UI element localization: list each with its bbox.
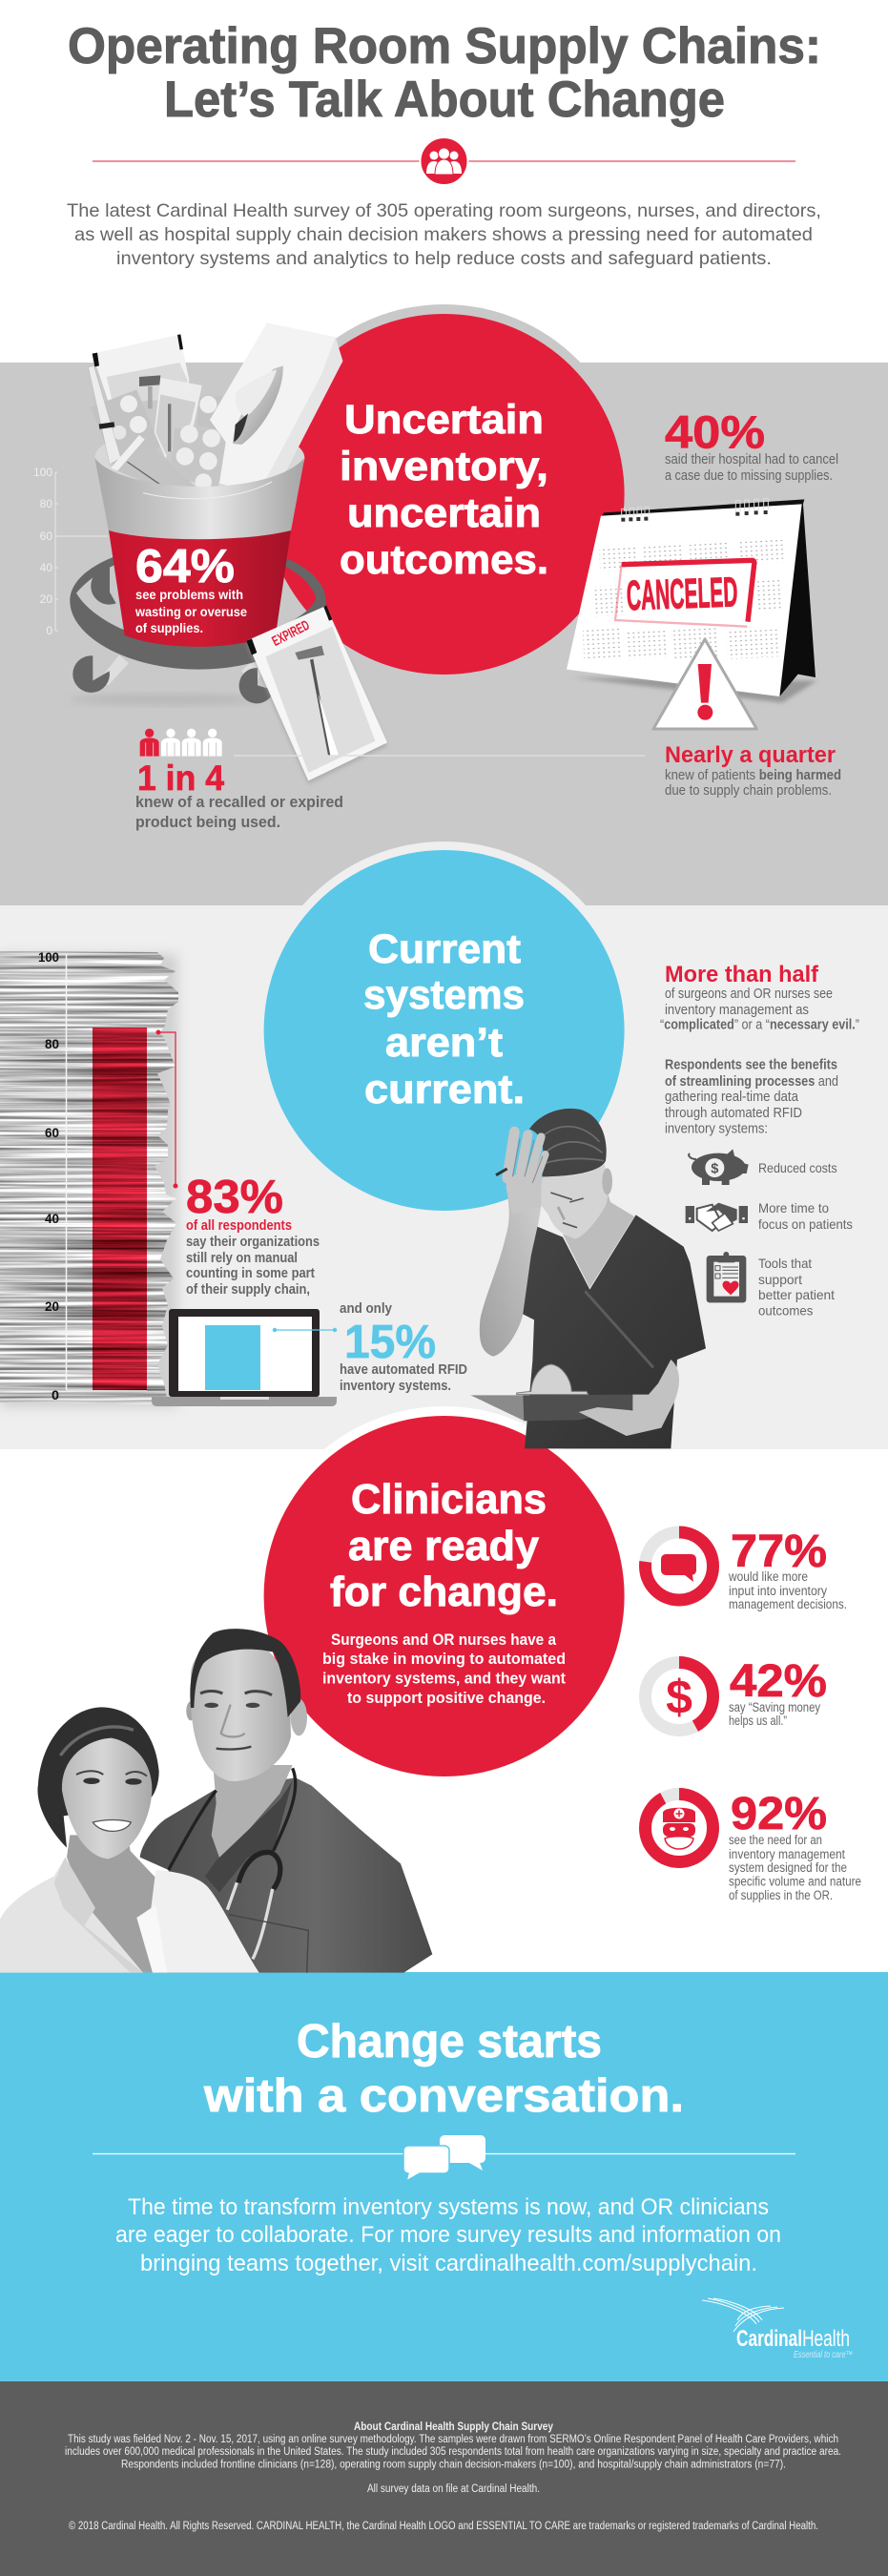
stat: 1 in 4 xyxy=(135,758,343,831)
stat: 42%: say “Saving money xyxy=(729,1700,820,1714)
axis labels: 60 xyxy=(45,1125,59,1140)
axis: 20 xyxy=(40,592,52,606)
heading: systems xyxy=(363,972,525,1018)
clipboard xyxy=(470,1395,525,1421)
label: tools: support xyxy=(758,1272,802,1287)
stat: 15%: inventory systems. xyxy=(340,1378,451,1394)
label: tools: better patient xyxy=(758,1287,835,1302)
heading: with a conversation. xyxy=(203,2070,684,2122)
heading: inventory, xyxy=(340,444,548,489)
stat: 77%: would like more xyxy=(728,1569,808,1584)
diagonal seam xyxy=(585,1291,653,1367)
stat: 77% xyxy=(728,1527,847,1611)
axis labels: 80 xyxy=(45,1036,59,1051)
stat: 77%: input into inventory xyxy=(729,1584,827,1598)
label: more time: focus on patients xyxy=(758,1216,853,1232)
methodology text xyxy=(65,2434,841,2495)
icon: piggy bank xyxy=(689,1149,749,1185)
stat: 1 in 4: product being used. xyxy=(135,814,280,831)
male clinician xyxy=(140,1629,432,1973)
heading: Clinicians xyxy=(351,1476,547,1523)
logo: Cardinal Health: CardinalHealth xyxy=(736,2326,850,2352)
lower arm and hand xyxy=(579,1360,679,1436)
stat: 83%: say their organizations xyxy=(186,1234,320,1250)
text: respondents benefits: of streamlining processes and xyxy=(665,1073,838,1090)
people icons: 1 in 4 xyxy=(140,729,222,757)
bucket interior xyxy=(94,425,304,491)
stat: nearly a quarter: knew of patients being harmed xyxy=(665,767,841,783)
stat: 15%: and only xyxy=(340,1300,393,1317)
methodology text: Respondents included frontline clinicians (n=128), operating room supply chain decision-makers (n=100), and hospital/supply chain administrators (n=77). xyxy=(121,2460,786,2471)
label: tools xyxy=(758,1256,835,1319)
body text: The time to transform inventory systems is now, and OR clinicians xyxy=(128,2194,769,2220)
chart: paper stack with 83% bar xyxy=(0,945,181,1412)
text: more than half: of surgeons and OR nurses see xyxy=(665,986,833,1002)
text: respondents benefits: through automated RFID xyxy=(665,1105,802,1121)
icon: dollar: $ xyxy=(666,1671,692,1724)
axis labels: 0 xyxy=(52,1387,59,1402)
stat: 64%: wasting or overuse xyxy=(134,604,247,619)
text: respondents benefits: gathering real-time data xyxy=(665,1089,799,1105)
photo: two clinicians xyxy=(0,1629,432,1973)
heading: aren’t xyxy=(385,1020,503,1066)
text: more than half: inventory management as xyxy=(665,1002,809,1018)
panel: uncertain inventory xyxy=(33,322,841,831)
stat: 77%: management decisions. xyxy=(729,1597,847,1611)
divider with people icon xyxy=(93,137,795,185)
circle body text: big stake in moving to automated xyxy=(322,1650,566,1668)
stat: 15%: have automated RFID xyxy=(340,1361,467,1378)
methodology text: All survey data on file at Cardinal Health. xyxy=(367,2483,540,2495)
circle: current systems xyxy=(264,850,625,1211)
donut: 77% xyxy=(645,1532,713,1600)
stat: 92%: specific volume and nature xyxy=(729,1874,861,1889)
circle body text: to support positive change. xyxy=(347,1689,546,1707)
icon: speech bubble xyxy=(661,1554,696,1582)
heading: Change starts xyxy=(297,2016,602,2067)
stat: 64% xyxy=(134,541,247,635)
axis labels xyxy=(38,949,59,1402)
text: respondents benefits xyxy=(665,1057,838,1137)
panel: current systems xyxy=(0,926,859,1448)
circle: uncertain inventory xyxy=(264,314,625,675)
heading: for change. xyxy=(330,1568,558,1615)
female clinician xyxy=(0,1707,259,1973)
expired pouch xyxy=(246,606,387,784)
stat: 40%: a case due to missing supplies. xyxy=(665,467,833,484)
text: respondents benefits: inventory systems: xyxy=(665,1120,768,1137)
stat: 83%: still rely on manual xyxy=(186,1250,298,1266)
circle body text xyxy=(322,1631,566,1707)
title: Operating Room Supply Chains: xyxy=(68,18,821,74)
callout line xyxy=(156,1030,177,1189)
stat: 40%: said their hospital had to cancel xyxy=(665,451,838,467)
panel: footer xyxy=(65,2421,841,2532)
tissue box xyxy=(210,322,342,489)
stat: 64%: 64% xyxy=(135,541,235,592)
stat: 42%: helps us all.” xyxy=(729,1714,787,1728)
label: more time xyxy=(758,1200,853,1232)
heading: Current xyxy=(368,926,521,972)
text: more than half: “complicated” or a “necessary evil.” xyxy=(660,1017,859,1032)
axis xyxy=(33,466,108,637)
intro text: as well as hospital supply chain decision makers shows a pressing need for automated xyxy=(74,224,813,245)
bucket red band xyxy=(109,530,291,647)
stat: 92%: inventory management xyxy=(729,1847,845,1861)
stat: 15%: 15% xyxy=(344,1317,436,1368)
red bar xyxy=(93,1028,147,1390)
stat: 83% xyxy=(186,1172,320,1298)
stat: 92%: of supplies in the OR. xyxy=(729,1888,833,1902)
intro text: The latest Cardinal Health survey of 305 operating room surgeons, nurses, and directors, xyxy=(67,200,821,221)
about heading: About Cardinal Health Supply Chain Survey xyxy=(354,2421,554,2433)
stat: 15% xyxy=(340,1300,467,1394)
heading: Uncertain xyxy=(344,397,544,443)
scrubs xyxy=(522,1215,706,1448)
canceled stamp xyxy=(615,560,754,627)
heading xyxy=(363,926,525,1112)
stat: 1 in 4: 1 in 4 xyxy=(137,758,224,798)
stat: 1 in 4: knew of a recalled or expired xyxy=(135,794,343,811)
hair xyxy=(529,1109,607,1176)
laptop chart xyxy=(152,1309,337,1406)
stat: 64%: of supplies. xyxy=(135,620,203,635)
circle: clinicians ready xyxy=(264,1416,625,1776)
text: respondents benefits: Respondents see the benefits xyxy=(665,1057,837,1073)
nurse photo and benefit icons xyxy=(470,1109,853,1448)
heading: are ready xyxy=(348,1523,540,1569)
panel: change starts with a conversation xyxy=(93,2016,853,2360)
donut: 92% xyxy=(645,1794,713,1862)
stat: 83%: 83% xyxy=(186,1172,283,1223)
axis: 80 xyxy=(40,497,52,510)
stat: nearly a quarter: due to supply chain problems. xyxy=(665,782,832,799)
stat: nearly a quarter xyxy=(665,742,841,799)
axis labels: 100 xyxy=(38,949,59,965)
supplies in bucket xyxy=(89,322,342,490)
stat: 77%: 77% xyxy=(731,1527,827,1577)
title xyxy=(68,18,821,128)
label: tools: Tools that xyxy=(758,1256,812,1271)
stand and wheels xyxy=(70,542,326,705)
stat: nearly a quarter: Nearly a quarter xyxy=(665,742,836,768)
axis: 60 xyxy=(40,530,52,543)
label: more time: More time to xyxy=(758,1200,829,1215)
stat: 92%: system designed for the xyxy=(729,1860,847,1875)
title: Let’s Talk About Change xyxy=(164,72,725,128)
stat: 92%: 92% xyxy=(731,1789,827,1839)
circle body text: inventory systems, and they want xyxy=(322,1670,566,1687)
axis labels: 20 xyxy=(45,1298,59,1314)
icon: piggy bank: $ xyxy=(711,1161,718,1176)
canceled stamp: CANCELED xyxy=(626,569,738,619)
logo: Cardinal Health: Essential to care™ xyxy=(794,2350,853,2360)
label: reduced costs: Reduced costs xyxy=(758,1160,837,1175)
stat: 83%: of all respondents xyxy=(186,1217,292,1234)
axis: 100 xyxy=(33,466,52,479)
axis: 40 xyxy=(40,561,52,574)
nurse xyxy=(470,1109,706,1448)
heading: uncertain xyxy=(347,490,541,536)
icon: surgical cap and mask xyxy=(663,1808,695,1849)
bucket front silver xyxy=(94,458,304,541)
stat: 40%: 40% xyxy=(665,408,765,458)
icon: clipboard heart xyxy=(707,1252,746,1302)
stat: 42%: 42% xyxy=(730,1656,827,1707)
donut: 42% xyxy=(645,1662,713,1731)
label: tools: outcomes xyxy=(758,1303,813,1319)
text: more than half xyxy=(660,962,859,1032)
intro text xyxy=(67,200,821,269)
stat: 92% xyxy=(729,1789,861,1902)
raised arm and hand xyxy=(480,1186,541,1357)
stat: 83%: of their supply chain, xyxy=(186,1281,310,1298)
stat: 42% xyxy=(729,1656,827,1728)
calendar illustration xyxy=(567,499,817,729)
heading xyxy=(203,2016,684,2122)
expired pouch: EXPIRED xyxy=(270,618,312,650)
heading: outcomes. xyxy=(340,537,548,583)
axis: 0 xyxy=(46,624,52,637)
face xyxy=(541,1164,609,1238)
stat: 64%: see problems with xyxy=(135,587,243,602)
intro text: inventory systems and analytics to help reduce costs and safeguard patients. xyxy=(116,248,772,269)
heading xyxy=(340,397,548,583)
stat: 83%: counting in some part xyxy=(186,1265,315,1281)
body text: are eager to collaborate. For more survey results and information on xyxy=(115,2222,781,2248)
axis labels: 40 xyxy=(45,1211,59,1226)
connector line xyxy=(234,755,645,757)
warning triangle xyxy=(653,639,756,729)
body text: bringing teams together, visit cardinalhealth.com/supplychain. xyxy=(140,2251,757,2276)
text: more than half: More than half xyxy=(665,962,819,987)
divider with speech bubbles xyxy=(93,2135,795,2181)
body text xyxy=(115,2194,781,2276)
logo: Cardinal Health xyxy=(702,2298,853,2360)
stat: 92%: see the need for an xyxy=(729,1833,822,1847)
bucket on stand with supplies xyxy=(70,322,387,784)
heading: current. xyxy=(364,1067,525,1112)
stat: 40% xyxy=(665,408,838,484)
neck and chest xyxy=(563,1180,634,1288)
panel: clinicians ready xyxy=(0,1476,861,1973)
circle body text: Surgeons and OR nurses have a xyxy=(331,1631,556,1649)
header xyxy=(67,18,821,269)
heading xyxy=(330,1476,558,1615)
icon: handshake xyxy=(686,1203,748,1231)
